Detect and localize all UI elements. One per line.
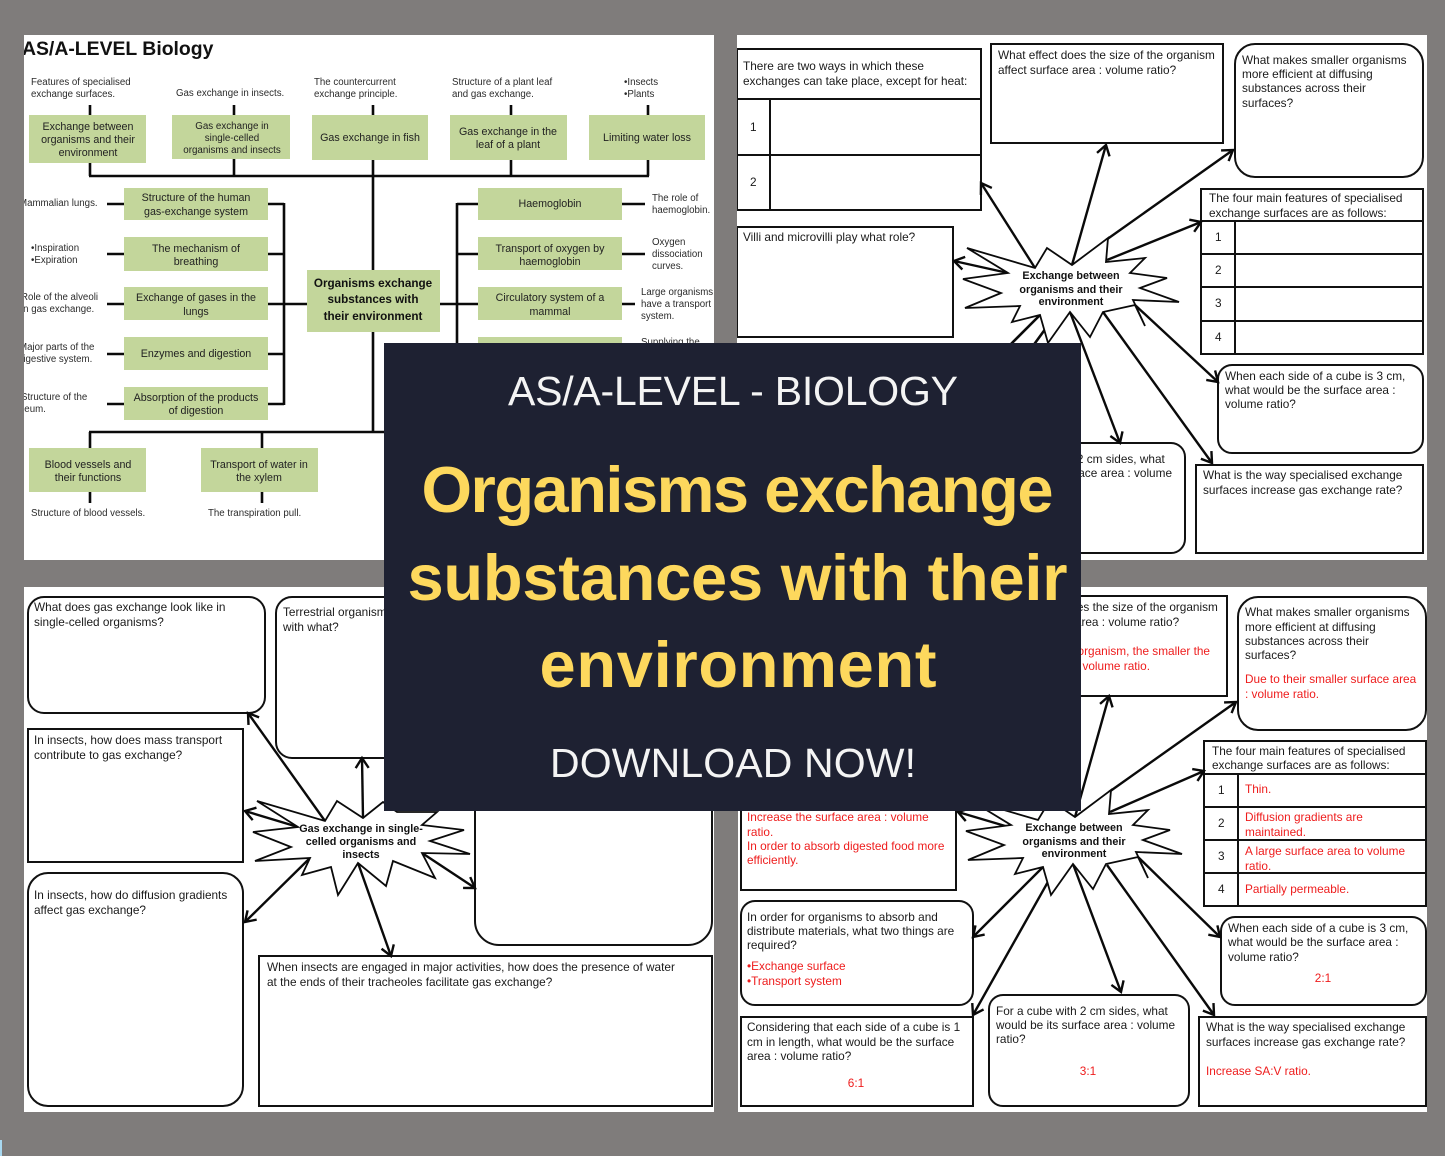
- box: 2 cm cube: would be its surface area : volume: [992, 466, 1172, 480]
- box: villi answer: ratio.: [747, 825, 773, 839]
- table: four main features: 4: [1215, 330, 1222, 344]
- box: 1 cm cube answer: [741, 1017, 973, 1106]
- left notes: ileum.: [20, 404, 46, 415]
- table: four main features answers: 1: [1218, 783, 1225, 797]
- central topic box: Organisms exchange: [314, 277, 433, 290]
- box: smaller organisms answer: : volume ratio.: [1245, 687, 1319, 701]
- box: gas exchange rate answer: [1199, 1017, 1426, 1106]
- box: size effect answer: What effect does the size of the organism: [1001, 600, 1218, 614]
- box: gas exchange rate: surfaces increase gas exchange rate?: [1203, 483, 1403, 497]
- box: 1 cm cube answer: Considering that each side of a cube is 1: [747, 1020, 960, 1034]
- box: 3 cm cube answer: volume ratio?: [1228, 950, 1299, 964]
- left green topic boxes: [124, 188, 268, 420]
- box: size effect: affect surface area : volume ratio?: [998, 63, 1177, 77]
- starburst: exchange between organisms: [963, 238, 1179, 343]
- box: size effect: [991, 44, 1223, 143]
- box: mass transport: [28, 729, 243, 862]
- table: four main features answers: [1204, 741, 1426, 906]
- top green topic boxes: leaf of a plant: [476, 139, 540, 151]
- table: four main features answers: exchange surfaces are as follows:: [1212, 758, 1390, 772]
- left green topic boxes: Absorption of the products: [134, 392, 258, 404]
- right green topic boxes: Haemoglobin: [519, 198, 582, 210]
- box: size effect answer: affect surface area : volume ratio?: [1001, 615, 1180, 629]
- box: tracheoles: When insects are engaged in major activities, how does the presence of water: [267, 960, 675, 974]
- table: four main features answers: ratio.: [1245, 859, 1271, 873]
- banner call to action: DOWNLOAD NOW!: [550, 740, 916, 786]
- table: four main features answers: 3: [1218, 849, 1225, 863]
- table: four main features answers: 4: [1218, 882, 1225, 896]
- starburst: exchange between organisms: environment: [1042, 848, 1107, 860]
- central topic box: [307, 270, 440, 332]
- box: gas exchange rate answer: Increase SA:V ratio.: [1206, 1064, 1311, 1078]
- box: smaller organisms: What makes smaller organisms: [1242, 53, 1407, 67]
- bottom green topic boxes: their functions: [55, 472, 121, 484]
- box: 2 cm cube answer: For a cube with 2 cm sides, what: [996, 1004, 1169, 1018]
- right notes: Large organisms: [641, 287, 713, 298]
- bottom green topic boxes: the xylem: [236, 472, 282, 484]
- table: two ways of exchange: [737, 49, 981, 210]
- top notes: exchange surfaces.: [31, 89, 115, 100]
- left green topic boxes: breathing: [174, 256, 218, 268]
- table: four main features answers: Partially permeable.: [1245, 882, 1349, 896]
- top green topic boxes: [29, 115, 705, 163]
- box: 1 cm cube answer: cm in length, what would be the surface: [747, 1035, 955, 1049]
- box: terrestrial organisms: [276, 597, 476, 758]
- left green topic boxes: Enzymes and digestion: [141, 348, 251, 360]
- top notes: Features of specialised: [31, 77, 131, 88]
- bottom green topic boxes: [29, 448, 318, 492]
- left green topic boxes: of digestion: [169, 405, 223, 417]
- left green topic boxes: Structure of the human: [142, 192, 250, 204]
- starburst: exchange between organisms: organisms and their: [1022, 836, 1126, 848]
- top notes: •Plants: [624, 89, 654, 100]
- box: 3 cm cube: what would be the surface area :: [1224, 383, 1396, 397]
- right green topic boxes: Transport of oxygen by: [496, 243, 605, 255]
- box: 3 cm cube answer: When each side of a cube is 3 cm,: [1228, 921, 1408, 935]
- box: villi answer: Increase the surface area : volume: [747, 810, 929, 824]
- table: two ways of exchange: exchanges can take place, except for heat:: [743, 74, 967, 88]
- right green topic boxes: Circulatory system of a: [496, 292, 604, 304]
- left green topic boxes: lungs: [183, 306, 209, 318]
- left notes: •Expiration: [31, 255, 77, 266]
- table: four main features answers: A large surface area to volume: [1245, 844, 1405, 858]
- right notes: Oxygen: [652, 237, 685, 248]
- table: four main features answers: The four main features of specialised: [1212, 744, 1405, 758]
- top notes: Gas exchange in insects.: [176, 88, 284, 99]
- box: gas exchange rate: What is the way specialised exchange: [1203, 468, 1403, 482]
- central topic box: their environment: [324, 310, 422, 323]
- bottom green topic boxes: Blood vessels and: [45, 459, 131, 471]
- box: mass transport: In insects, how does mass transport: [34, 733, 223, 747]
- top green topic boxes: Gas exchange in the: [459, 126, 557, 138]
- top notes: and gas exchange.: [452, 89, 534, 100]
- top green topic boxes: Gas exchange in fish: [320, 132, 420, 144]
- box: 1 cm cube answer: 6:1: [848, 1076, 864, 1090]
- box: 2 cm cube answer: 3:1: [1080, 1064, 1096, 1078]
- left notes: •Inspiration: [31, 243, 79, 254]
- box: partly hidden right: [475, 760, 712, 945]
- box: 3 cm cube: When each side of a cube is 3 cm,: [1225, 369, 1405, 383]
- connector lines: [89, 105, 649, 503]
- box: 2 cm cube answer: [989, 995, 1189, 1106]
- box: size effect answer: [994, 596, 1227, 696]
- box: two things required answer: In order for organisms to absorb and: [747, 910, 938, 924]
- central title banner: [384, 343, 1081, 811]
- table: two ways of exchange: 2: [750, 175, 757, 189]
- box: mass transport: contribute to gas exchange?: [34, 748, 183, 762]
- box: two things required answer: distribute materials, what two things are: [747, 924, 955, 938]
- box: smaller organisms answer: [1238, 597, 1426, 730]
- table: two ways of exchange: 1: [750, 120, 757, 134]
- central topic box: substances with: [328, 293, 418, 306]
- box: single-celled: single-celled organisms?: [34, 615, 164, 629]
- right notes: haemoglobin.: [652, 205, 710, 216]
- table: four main features: exchange surfaces are as follows:: [1209, 206, 1387, 220]
- box: smaller organisms: surfaces?: [1242, 96, 1294, 110]
- box: 2 cm cube: [986, 443, 1185, 553]
- box: diffusion gradients: In insects, how do diffusion gradients: [34, 888, 227, 902]
- box: tracheoles: [259, 956, 712, 1106]
- top green topic boxes: Exchange between: [43, 121, 134, 133]
- left notes: [18, 198, 98, 415]
- left notes: Structure of the: [21, 392, 87, 403]
- box: smaller organisms: [1235, 44, 1423, 177]
- top notes: The countercurrent: [314, 77, 396, 88]
- right notes: dissociation: [652, 249, 703, 260]
- starburst: exchange between organisms: [966, 790, 1182, 895]
- table: four main features answers: Thin.: [1245, 782, 1271, 796]
- box: smaller organisms: substances across their: [1242, 81, 1366, 95]
- box: villi answer: In order to absorb digested food more: [747, 839, 945, 853]
- banner main title: Organisms exchange: [422, 453, 1054, 526]
- panel: blank worksheet exchange: [737, 35, 1427, 560]
- box: villi answer: [741, 780, 956, 890]
- box: 2 cm cube answer: would be its surface area : volume: [995, 1018, 1175, 1032]
- bottom green topic boxes: Transport of water in: [210, 459, 308, 471]
- arrows from starburst: [245, 713, 475, 956]
- box: smaller organisms answer: surfaces?: [1245, 648, 1297, 662]
- box: diffusion gradients: affect gas exchange?: [34, 903, 146, 917]
- box: villi: Villi and microvilli play what role?: [743, 230, 916, 244]
- banner subtitle: AS/A-LEVEL - BIOLOGY: [508, 368, 958, 414]
- box: size effect answer: surface area : volume ratio.: [1007, 659, 1150, 673]
- top green topic boxes: organisms and insects: [183, 145, 281, 156]
- box: gas exchange rate: [1196, 465, 1423, 553]
- arrows from starburst: [958, 696, 1236, 1015]
- box: villi: [737, 227, 953, 337]
- table: four main features answers: Diffusion gradients are: [1245, 810, 1363, 824]
- top green topic boxes: environment: [59, 147, 117, 159]
- box: size effect: What effect does the size of the organism: [998, 48, 1215, 62]
- box: terrestrial organisms: with what?: [282, 620, 339, 634]
- top green topic boxes: Gas exchange in: [195, 121, 269, 132]
- right green topic boxes: haemoglobin: [519, 256, 581, 268]
- top notes: •Insects: [624, 77, 658, 88]
- top notes: exchange principle.: [314, 89, 397, 100]
- box: 3 cm cube answer: [1221, 917, 1426, 1005]
- banner main title: [408, 453, 1068, 701]
- box: 1 cm cube answer: area : volume ratio?: [747, 1049, 852, 1063]
- left notes: Major parts of the: [19, 342, 94, 353]
- table: two ways of exchange: There are two ways in which these: [743, 59, 924, 73]
- right notes: [641, 193, 713, 348]
- box: size effect answer: The larger the organism, the smaller the: [1001, 644, 1210, 658]
- box: 2 cm cube: For a cube with 2 cm sides, what: [993, 452, 1166, 466]
- box: 2 cm cube answer: ratio?: [996, 1032, 1026, 1046]
- box: smaller organisms answer: Due to their smaller surface area: [1245, 672, 1417, 686]
- box: two things required answer: [741, 901, 973, 1005]
- box: smaller organisms answer: more efficient at diffusing: [1245, 620, 1376, 634]
- starburst: exchange between organisms: Exchange between: [1022, 270, 1120, 282]
- box: single-celled: [28, 597, 265, 713]
- box: gas exchange rate answer: surfaces increase gas exchange rate?: [1206, 1035, 1406, 1049]
- bottom notes: Structure of blood vessels.: [31, 508, 145, 519]
- right notes: curves.: [652, 261, 683, 272]
- box: two things required answer: •Exchange surface: [747, 959, 846, 973]
- left notes: digestive system.: [18, 354, 92, 365]
- starburst: gas exchange in single-celled organisms: [253, 801, 470, 895]
- left notes: Mammalian lungs.: [19, 198, 98, 209]
- corner accent: [0, 1140, 2, 1156]
- right notes: The role of: [652, 193, 699, 204]
- starburst: gas exchange in single-celled organisms: insects: [342, 849, 380, 861]
- panel: topic mind map: [18, 35, 714, 560]
- left green topic boxes: The mechanism of: [152, 243, 240, 255]
- table: four main features answers: 2: [1218, 816, 1225, 830]
- top notes: Structure of a plant leaf: [452, 77, 552, 88]
- top green topic boxes: Limiting water loss: [603, 132, 691, 144]
- starburst: exchange between organisms: organisms and their: [1019, 284, 1123, 296]
- banner main title: substances with their: [408, 541, 1068, 614]
- table: four main features: [1201, 189, 1423, 354]
- starburst: gas exchange in single-celled organisms: celled organisms and: [306, 836, 416, 848]
- table: four main features answers: maintained.: [1245, 825, 1306, 839]
- table: four main features: 3: [1215, 296, 1222, 310]
- box: smaller organisms answer: What makes smaller organisms: [1245, 605, 1410, 619]
- box: smaller organisms: more efficient at diffusing: [1242, 67, 1373, 81]
- right notes: Supplying the: [641, 337, 700, 348]
- right green topic boxes: [478, 188, 622, 370]
- panel: answered worksheet: [738, 587, 1427, 1112]
- left notes: Role of the alveoli: [21, 292, 98, 303]
- box: terrestrial organisms: Terrestrial organisms: [283, 605, 393, 619]
- table: four main features: 1: [1215, 230, 1222, 244]
- arrows from starburst: [954, 145, 1233, 463]
- table: four main features: The four main features of specialised: [1209, 191, 1402, 205]
- left green topic boxes: Exchange of gases in the: [136, 292, 256, 304]
- table: four main features: 2: [1215, 263, 1222, 277]
- box: smaller organisms answer: substances across their: [1245, 634, 1369, 648]
- panel: blank worksheet single-celled organisms: [24, 587, 714, 1112]
- box: 3 cm cube: [1218, 365, 1423, 453]
- box: tracheoles: at the ends of their tracheoles facilitate gas exchange?: [267, 975, 553, 989]
- right notes: system.: [641, 311, 674, 322]
- top green topic boxes: single-celled: [205, 133, 259, 144]
- box: 3 cm cube answer: what would be the surface area :: [1227, 935, 1399, 949]
- top green topic boxes: organisms and their: [41, 134, 135, 146]
- box: villi answer: efficiently.: [747, 853, 798, 867]
- top notes: [31, 77, 658, 100]
- box: 3 cm cube: volume ratio?: [1225, 397, 1296, 411]
- box: gas exchange rate answer: What is the way specialised exchange: [1206, 1020, 1406, 1034]
- starburst: exchange between organisms: environment: [1039, 296, 1104, 308]
- right notes: have a transport: [641, 299, 711, 310]
- box: two things required answer: required?: [747, 938, 797, 952]
- box: 3 cm cube answer: 2:1: [1315, 971, 1331, 985]
- right green topic boxes: mammal: [530, 306, 570, 318]
- box: single-celled: What does gas exchange look like in: [34, 600, 226, 614]
- banner main title: environment: [540, 628, 936, 701]
- starburst: gas exchange in single-celled organisms: Gas exchange in single-: [299, 823, 423, 835]
- bottom notes: [31, 508, 301, 519]
- box: diffusion gradients: [28, 873, 243, 1106]
- left notes: in gas exchange.: [21, 304, 94, 315]
- starburst: exchange between organisms: Exchange between: [1025, 822, 1123, 834]
- heading: AS/A-Level Biology: AS/A-LEVEL Biology: [22, 38, 214, 60]
- box: two things required answer: •Transport system: [747, 974, 842, 988]
- bottom notes: The transpiration pull.: [208, 508, 301, 519]
- left green topic boxes: gas-exchange system: [144, 206, 248, 218]
